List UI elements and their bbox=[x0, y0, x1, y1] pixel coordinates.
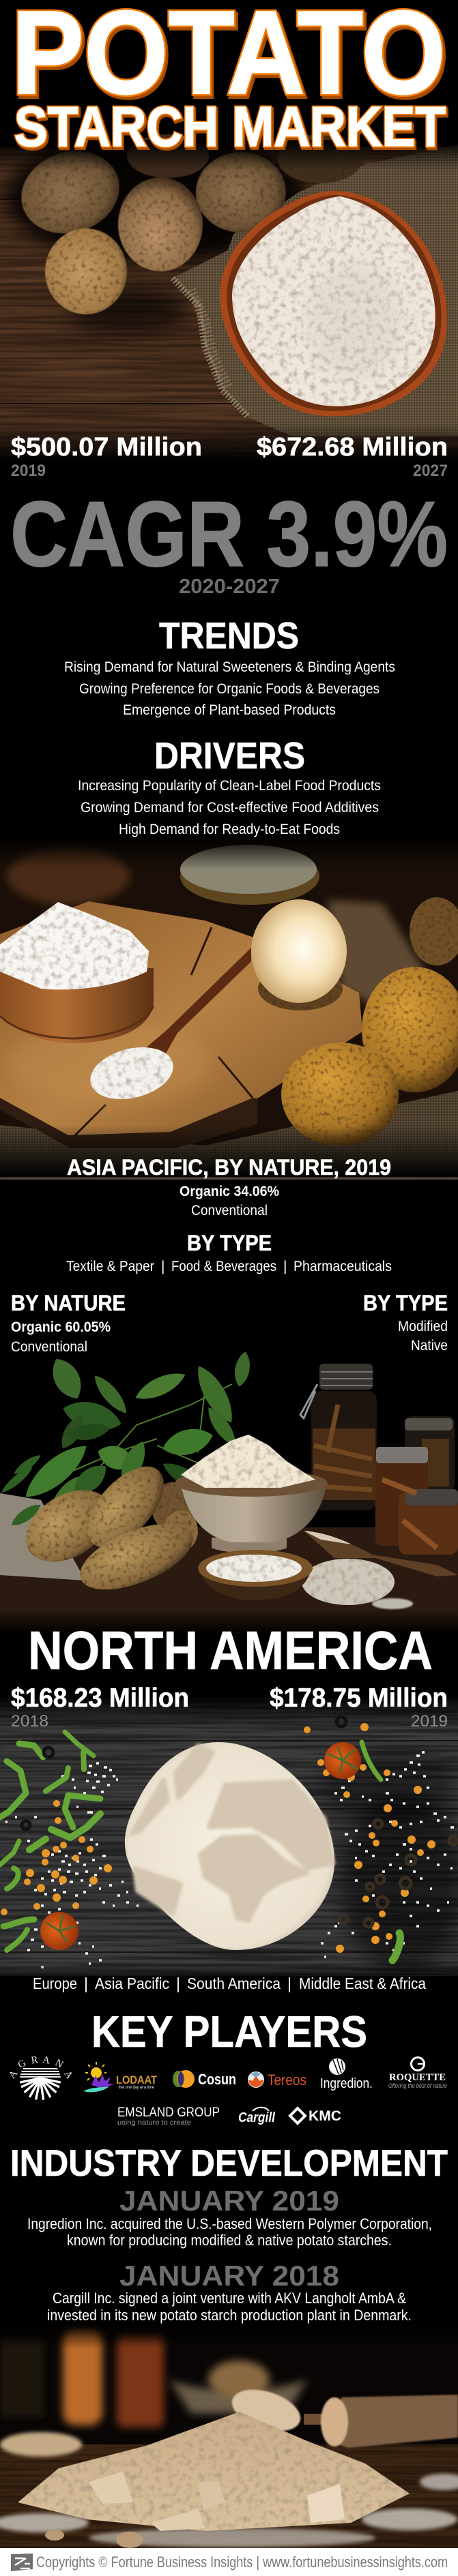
glass jars bbox=[300, 1364, 458, 1555]
by type: applications: BY TYPE bbox=[187, 1231, 272, 1255]
other regions: Middle East & Africa bbox=[299, 1975, 426, 1992]
starch bowl bbox=[220, 191, 447, 417]
trends section: Rising Demand for Natural Sweeteners & Binding Agents bbox=[64, 659, 395, 675]
by type list bbox=[363, 1291, 448, 1353]
logo: Agrana: A bbox=[7, 2068, 20, 2081]
wooden cup of starch bbox=[0, 902, 154, 1043]
market value 2027 bbox=[257, 433, 448, 480]
tomatoes bbox=[40, 1742, 361, 1950]
corn kernels bbox=[1, 1723, 435, 1953]
by type list: BY TYPE bbox=[363, 1291, 448, 1315]
development: January 2018: JANUARY 2018 bbox=[119, 2260, 339, 2292]
logo: Lodaat bbox=[83, 2062, 158, 2092]
olive rings bbox=[22, 1717, 457, 1927]
logo: Agrana bbox=[10, 2056, 72, 2100]
linen cloth bbox=[0, 1493, 85, 1581]
other regions: Asia Pacific bbox=[95, 1975, 169, 1992]
by type list: Native bbox=[411, 1337, 448, 1353]
North America value 2019: 2019 bbox=[411, 1712, 448, 1731]
development: January 2018 bbox=[47, 2260, 412, 2324]
other regions: South America bbox=[187, 1975, 281, 1992]
Asia Pacific by nature: ASIA PACIFIC, BY NATURE, 2019 bbox=[67, 1155, 391, 1180]
blurred background objects bbox=[0, 2328, 307, 2427]
CAGR headline: 2020-2027 bbox=[179, 574, 280, 598]
other regions: | bbox=[84, 1975, 88, 1992]
other regions bbox=[0, 1975, 458, 1996]
by type: applications bbox=[66, 1231, 392, 1274]
small dish of starch bbox=[198, 1550, 313, 1600]
by type: applications: Food & Beverages bbox=[171, 1258, 276, 1274]
logo: Agrana: A bbox=[61, 2069, 75, 2081]
development: January 2019 bbox=[27, 2185, 432, 2249]
logo: Roquette: ROQUETTE bbox=[389, 2072, 446, 2083]
continents bbox=[131, 1746, 333, 1921]
table bbox=[0, 2444, 458, 2548]
logo: Emsland Group: using nature to create bbox=[117, 2119, 191, 2127]
by type: applications: | bbox=[283, 1259, 287, 1274]
ceramic bowl of starch bbox=[175, 1435, 328, 1553]
logo: Agrana: N bbox=[53, 2057, 65, 2071]
herb leaves bbox=[0, 1351, 253, 1530]
logo: Cargill: Cargill bbox=[238, 2110, 275, 2125]
trends section: Growing Preference for Organic Foods & Beverages bbox=[79, 680, 380, 697]
green pepper strips bbox=[0, 1732, 400, 1960]
logo: Emsland Group: EMSLAND GROUP bbox=[117, 2106, 220, 2120]
by type: applications: Textile & Paper bbox=[66, 1258, 154, 1274]
development: January 2018: Cargill Inc. signed a joint venture with AKV Langholt AmbA & bbox=[53, 2290, 406, 2307]
wooden board bbox=[0, 901, 362, 1148]
by nature list: Organic 60.05% bbox=[11, 1319, 111, 1335]
market value 2027: $672.68 Million bbox=[257, 433, 448, 462]
logo: Emsland Group bbox=[117, 2106, 220, 2127]
North America value 2018: 2018 bbox=[11, 1712, 48, 1731]
logo: Ingredion: Ingredion. bbox=[320, 2076, 373, 2091]
by nature list bbox=[11, 1291, 126, 1355]
logo: Roquette bbox=[388, 2058, 447, 2089]
market value 2019 bbox=[11, 433, 202, 480]
potatoes bbox=[10, 134, 362, 314]
potatoes bbox=[12, 1453, 202, 1603]
photo: starch pile with rolling pin bbox=[0, 2322, 458, 2548]
development: January 2018: invested in its new potato starch production plant in Denmark. bbox=[47, 2307, 412, 2324]
photo: potatoes and starch bowl on wood bbox=[0, 133, 458, 461]
driver: ready-to-eat foods: High Demand for Ready-to-Eat Foods bbox=[119, 821, 340, 837]
by nature list: Conventional bbox=[11, 1338, 87, 1355]
trends section: Emergence of Plant-based Products bbox=[123, 702, 336, 718]
North America value 2018: $168.23 Million bbox=[11, 1683, 189, 1713]
by type: applications: Pharmaceuticals bbox=[294, 1258, 392, 1274]
logo: Roquette: Offering the best of nature bbox=[388, 2082, 447, 2089]
drivers section: Increasing Popularity of Clean-Label Food Products bbox=[78, 777, 381, 794]
burlap cloth bbox=[173, 145, 458, 436]
drivers section: Growing Demand for Cost-effective Food Additives bbox=[81, 799, 379, 815]
logo: Agrana: G bbox=[16, 2058, 28, 2071]
scattered rice bbox=[5, 1763, 139, 1967]
by type: applications: | bbox=[161, 1259, 164, 1274]
logo: Agrana: R bbox=[31, 2054, 39, 2067]
photo: dough globe on black wood with toppings bbox=[0, 1694, 458, 1983]
logo: Ingredion bbox=[320, 2058, 373, 2091]
trends section bbox=[64, 614, 395, 718]
dough globe bbox=[125, 1742, 334, 1950]
halved potatoes bbox=[180, 845, 347, 1010]
starch pile bbox=[18, 2412, 410, 2548]
development: January 2019: JANUARY 2019 bbox=[119, 2185, 339, 2217]
logo: Tereos bbox=[248, 2071, 306, 2088]
logo: Lodaat: LODAAT bbox=[116, 2073, 158, 2086]
icon: Fortune Business Insights logo bbox=[11, 2553, 33, 2571]
North America value 2019: $178.75 Million bbox=[270, 1683, 448, 1713]
North America value 2019 bbox=[270, 1683, 448, 1731]
logo: KMC bbox=[290, 2108, 341, 2124]
other regions: | bbox=[287, 1975, 291, 1992]
Asia Pacific by nature: Conventional bbox=[191, 1202, 268, 1218]
by type list: Modified bbox=[398, 1318, 448, 1334]
North America value 2018 bbox=[11, 1683, 189, 1731]
by nature list: BY NATURE bbox=[11, 1291, 126, 1315]
table dusting bbox=[0, 2432, 458, 2547]
Asia Pacific by nature: Organic 34.06% bbox=[180, 1183, 279, 1199]
whole potatoes bbox=[281, 897, 458, 1146]
drivers section: DRIVERS bbox=[154, 734, 305, 777]
logo: Lodaat: live one day at a time bbox=[119, 2086, 155, 2090]
market value 2019: $500.07 Million bbox=[11, 433, 202, 462]
other regions: Europe bbox=[33, 1975, 77, 1992]
other regions: | bbox=[176, 1975, 180, 1992]
market value 2027: 2027 bbox=[413, 462, 448, 480]
market value 2019: 2019 bbox=[11, 462, 46, 480]
logo: KMC: KMC bbox=[309, 2108, 341, 2124]
rolling pins bbox=[227, 2382, 458, 2448]
logo: Tereos: Tereos bbox=[268, 2071, 306, 2088]
trends section: TRENDS bbox=[159, 614, 299, 657]
Asia Pacific by nature bbox=[67, 1155, 391, 1218]
key players heading: KEY PLAYERS bbox=[91, 2007, 367, 2056]
scoop and spilled starch bbox=[302, 1531, 458, 1609]
logo: Cosun bbox=[173, 2070, 236, 2088]
logo: Agrana: A bbox=[42, 2054, 51, 2067]
development: January 2019: known for producing modified & native potato starches. bbox=[67, 2232, 392, 2249]
photo: potatoes, herbs, jars and starch bowl bbox=[0, 1351, 458, 1636]
footer bar bbox=[0, 2548, 458, 2576]
wooden spoon with starch bbox=[85, 948, 251, 1107]
drivers section bbox=[78, 734, 381, 815]
logo: Cosun: Cosun bbox=[198, 2071, 236, 2088]
key players logos bbox=[7, 2054, 447, 2127]
photo: cutting board with starch and potatoes bbox=[0, 835, 458, 1180]
burlap cloth behind and below bbox=[0, 1091, 458, 1180]
